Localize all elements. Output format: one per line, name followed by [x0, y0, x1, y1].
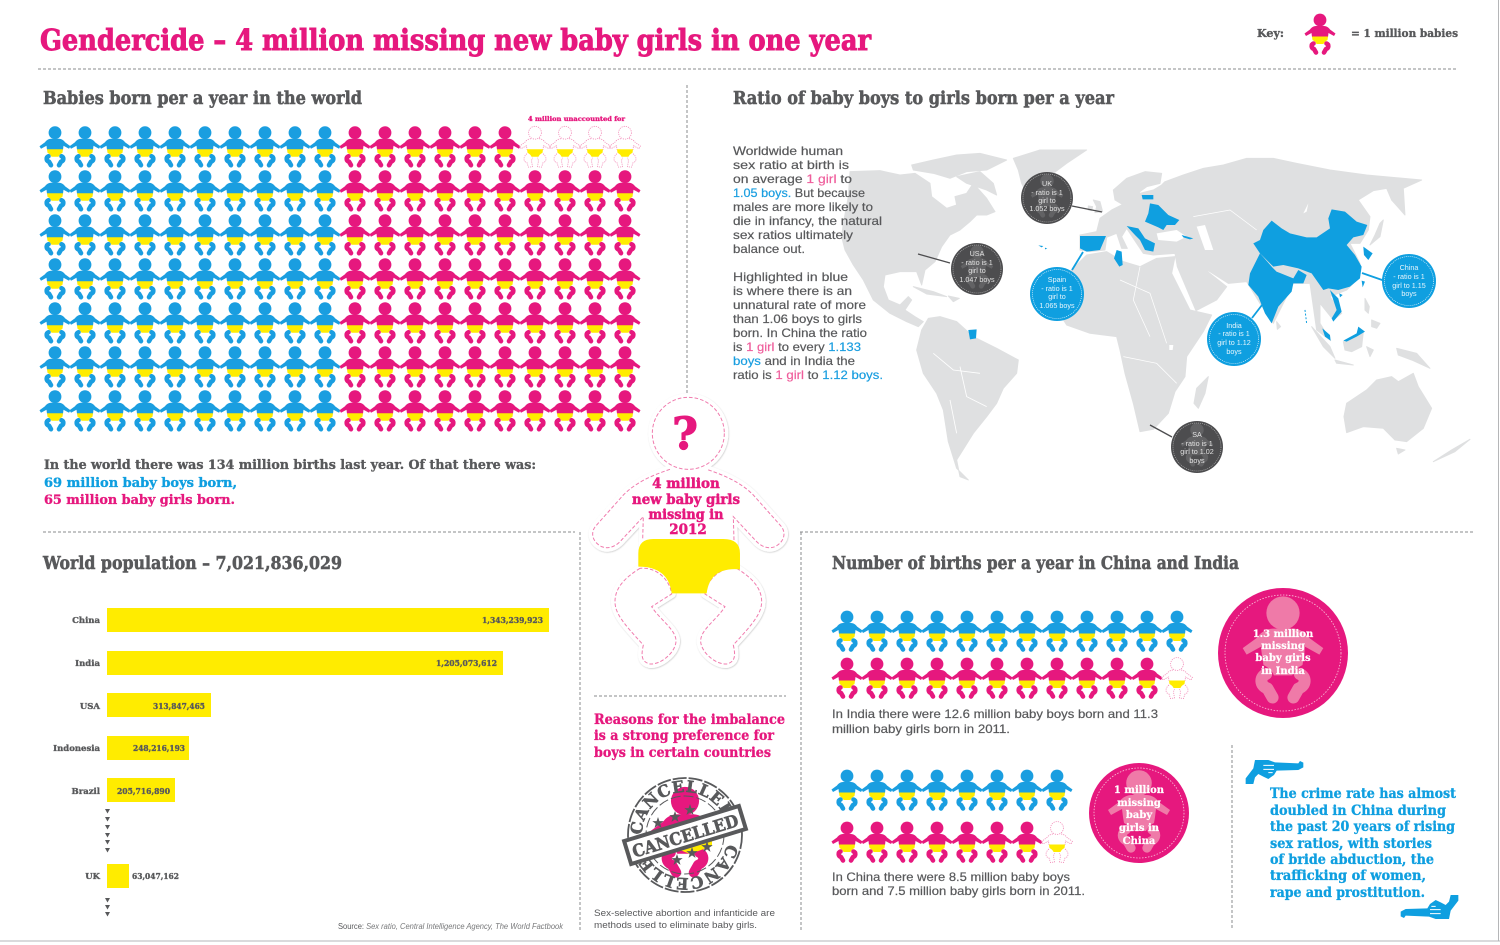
continuation arrows: [105, 809, 110, 916]
callout connectors: [918, 206, 1172, 437]
callout: China: boys: [1401, 289, 1417, 298]
text: sex ratio explanation: is 1 girl to every 1.133: [733, 340, 861, 354]
source: Source: Sex ratio, Central Intelligence Agency, The World Factbook: [338, 922, 564, 931]
text: crime rate: [1270, 786, 1456, 901]
badge: India missing: baby girls: [1255, 653, 1311, 664]
text: crime rate: of bride abduction, the: [1270, 852, 1434, 868]
key: 1 million babies: Key:: [1257, 27, 1284, 40]
central missing baby figure: new baby girls: [632, 492, 740, 508]
callout connectors: blue: [1072, 252, 1385, 318]
callout: India: girl to 1.12: [1217, 338, 1251, 347]
pictogram: China girls: [832, 822, 1072, 862]
pictogram: baby girls: [340, 126, 640, 429]
text: India births: In India there were 12.6 million baby boys born and 11.3: [832, 707, 1158, 721]
callout: Spain: 1.065 boys: [1039, 301, 1075, 310]
text: sex ratio explanation: boys and in India the: [733, 354, 855, 368]
panel: world population bar chart: [42, 554, 564, 931]
text: methods: methods used to eliminate baby girls.: [594, 920, 757, 930]
world map: [842, 150, 1470, 480]
badge: China missing: [1089, 763, 1189, 863]
heading: world population: World population – 7,021,836,029: [42, 554, 342, 574]
heading: babies born: Babies born per a year in the world: [43, 89, 362, 109]
badge: China missing: baby: [1126, 810, 1153, 821]
callout: UK: UK: [1042, 179, 1052, 188]
text: methods: Sex-selective abortion and infanticide are: [594, 908, 775, 918]
text: sex ratio explanation: balance out.: [733, 242, 805, 256]
country labels: China: [72, 616, 100, 626]
bars: [107, 608, 549, 888]
central missing baby figure: ?: [672, 409, 698, 460]
heading: reasons: boys in certain countries: [594, 745, 771, 761]
text: sex ratio explanation: on average 1 girl to: [733, 172, 852, 186]
heading: ratio: Ratio of baby boys to girls born per a year: [733, 89, 1115, 109]
icon: revolver bottom: [1401, 895, 1458, 919]
central missing baby figure: 4 million: [652, 476, 720, 492]
callout: UK: [1021, 172, 1073, 224]
population values: 248,216,193: [133, 744, 185, 754]
callout: Spain: [1030, 267, 1084, 321]
badge: India missing: 1.3 million: [1253, 629, 1314, 640]
population values: 63,047,162: [132, 872, 179, 882]
callout: South Africa: girl to 1.02: [1180, 447, 1214, 456]
text: sex ratio explanation: is where there is an: [733, 284, 852, 298]
population values: [117, 616, 543, 882]
icon: cancelled stamp: CANCELLED: [630, 811, 741, 863]
panel: crime rate: [1246, 760, 1458, 919]
pictogram: 4 million unaccounted for: 4 million unaccounted for: [528, 115, 626, 123]
pictogram: India girls: [832, 658, 1192, 698]
country labels: [53, 616, 101, 882]
text: births summary: 65 million baby girls born.: [44, 493, 235, 508]
heading: reasons: [594, 712, 785, 761]
text: crime rate: The crime rate has almost: [1270, 786, 1456, 802]
text: crime rate: doubled in China during: [1270, 803, 1446, 819]
callout: India: - ratio is 1: [1218, 329, 1250, 338]
callout: UK: 1.052 boys: [1029, 204, 1065, 213]
badge: India missing: missing: [1261, 641, 1305, 652]
callout: South Africa: - ratio is 1: [1181, 439, 1213, 448]
central missing baby figure: [593, 397, 784, 664]
text: births summary: [44, 458, 536, 508]
country labels: UK: [85, 872, 101, 882]
icon: key baby: [1304, 14, 1336, 53]
text: China births: [832, 870, 1085, 898]
callout: South Africa: SA: [1192, 430, 1202, 439]
population values: 205,716,890: [117, 787, 170, 797]
callout: China: China: [1400, 263, 1418, 272]
text: sex ratio explanation: [733, 144, 883, 382]
callout: India: India: [1226, 321, 1242, 330]
text: sex ratio explanation: unnatural rate of more: [733, 298, 866, 312]
badge: China missing: 1 million: [1114, 785, 1165, 796]
callout: Spain: girl to: [1048, 292, 1066, 301]
central missing baby figure: 2012: [669, 522, 707, 538]
heading: reasons: Reasons for the imbalance: [594, 712, 785, 728]
text: China births: In China there were 8.5 million baby boys: [832, 870, 1070, 884]
text: sex ratio explanation: sex ratio at birth is: [733, 158, 849, 172]
text: sex ratio explanation: Highlighted in blue: [733, 270, 848, 284]
badge: China missing: China: [1123, 836, 1156, 847]
heading: births China India: Number of births per a year in China and India: [832, 554, 1239, 574]
text: sex ratio explanation: Worldwide human: [733, 144, 843, 158]
text: India births: million baby girls born in 2011.: [832, 722, 1010, 736]
country labels: USA: [80, 702, 100, 712]
country labels: Brazil: [72, 787, 101, 797]
text: births summary: In the world there was 134 million births last year. Of that there was:: [44, 458, 536, 473]
icon: cancelled stamp: CANCELLED... CANCELLED: [630, 780, 738, 890]
badge: India missing: in India: [1261, 666, 1305, 677]
pictogram: India boys: [832, 611, 1192, 650]
panel: births in China and India: [832, 554, 1348, 898]
text: births summary: 69 million baby boys born,: [44, 476, 237, 491]
text: sex ratio explanation: born. In China the ratio: [733, 326, 867, 340]
callout: USA: 1.047 boys: [959, 275, 995, 284]
badge: China missing: girls in: [1119, 823, 1160, 834]
population values: 313,847,465: [153, 702, 205, 712]
panel: ratio of boys to girls map: [733, 89, 1470, 480]
text: sex ratio explanation: die in infancy, the natural: [733, 214, 882, 228]
key: 1 million babies: = 1 million babies: [1351, 27, 1458, 40]
callout: USA: girl to: [968, 266, 986, 275]
pictogram: 4 million unaccounted for: [520, 115, 640, 167]
text: methods: [594, 908, 775, 930]
text: crime rate: sex ratios, with stories: [1270, 836, 1432, 852]
callout: China: [1382, 254, 1436, 308]
country labels: Indonesia: [53, 744, 100, 754]
panel: babies born per a year: [40, 89, 640, 508]
callout: China: girl to 1.15: [1392, 281, 1426, 290]
badge: India missing: [1218, 588, 1348, 718]
callout: South Africa: boys: [1189, 456, 1205, 465]
text: crime rate: trafficking of women,: [1270, 868, 1426, 884]
callout: South Africa: [1171, 421, 1223, 473]
pictogram: China boys: [832, 770, 1072, 808]
callout: Spain: Spain: [1048, 275, 1066, 284]
population values: 1,343,239,923: [482, 616, 543, 626]
central missing baby figure: missing in: [648, 507, 724, 523]
panel: reasons for the imbalance: [594, 712, 785, 930]
text: sex ratio explanation: males are more likely to: [733, 200, 873, 214]
population values: 1,205,073,612: [436, 659, 497, 669]
callout: USA: - ratio is 1: [961, 258, 993, 267]
text: China births: born and 7.5 million baby girls born in 2011.: [832, 884, 1085, 898]
callout: UK: - ratio is 1: [1031, 188, 1063, 197]
heading: reasons: is a strong preference for: [594, 728, 775, 744]
callout: UK: girl to: [1038, 196, 1056, 205]
badge: China missing: missing: [1117, 798, 1161, 809]
callout: Spain: - ratio is 1: [1041, 284, 1073, 293]
callout: India: boys: [1226, 347, 1242, 356]
key: 1 million babies: [1257, 14, 1458, 53]
text: sex ratio explanation: 1.05 boys. But because: [733, 186, 865, 200]
country labels: India: [75, 659, 100, 669]
pictogram: baby boys: [40, 126, 340, 429]
callout: China: - ratio is 1: [1393, 272, 1425, 281]
title: Gendercide – 4 million missing new baby girls in one year: [40, 23, 872, 57]
icon: revolver top: [1246, 760, 1303, 784]
callout: India: [1207, 312, 1261, 366]
callout: USA: USA: [970, 249, 985, 258]
text: crime rate: the past 20 years of rising: [1270, 819, 1455, 835]
text: sex ratio explanation: sex ratios ultimately: [733, 228, 853, 242]
text: sex ratio explanation: ratio is 1 girl to 1.12 boys.: [733, 368, 883, 382]
text: crime rate: rape and prostitution.: [1270, 885, 1425, 901]
text: sex ratio explanation: than 1.06 boys to girls: [733, 312, 862, 326]
callout: USA: [951, 243, 1003, 295]
text: India births: [832, 707, 1158, 736]
